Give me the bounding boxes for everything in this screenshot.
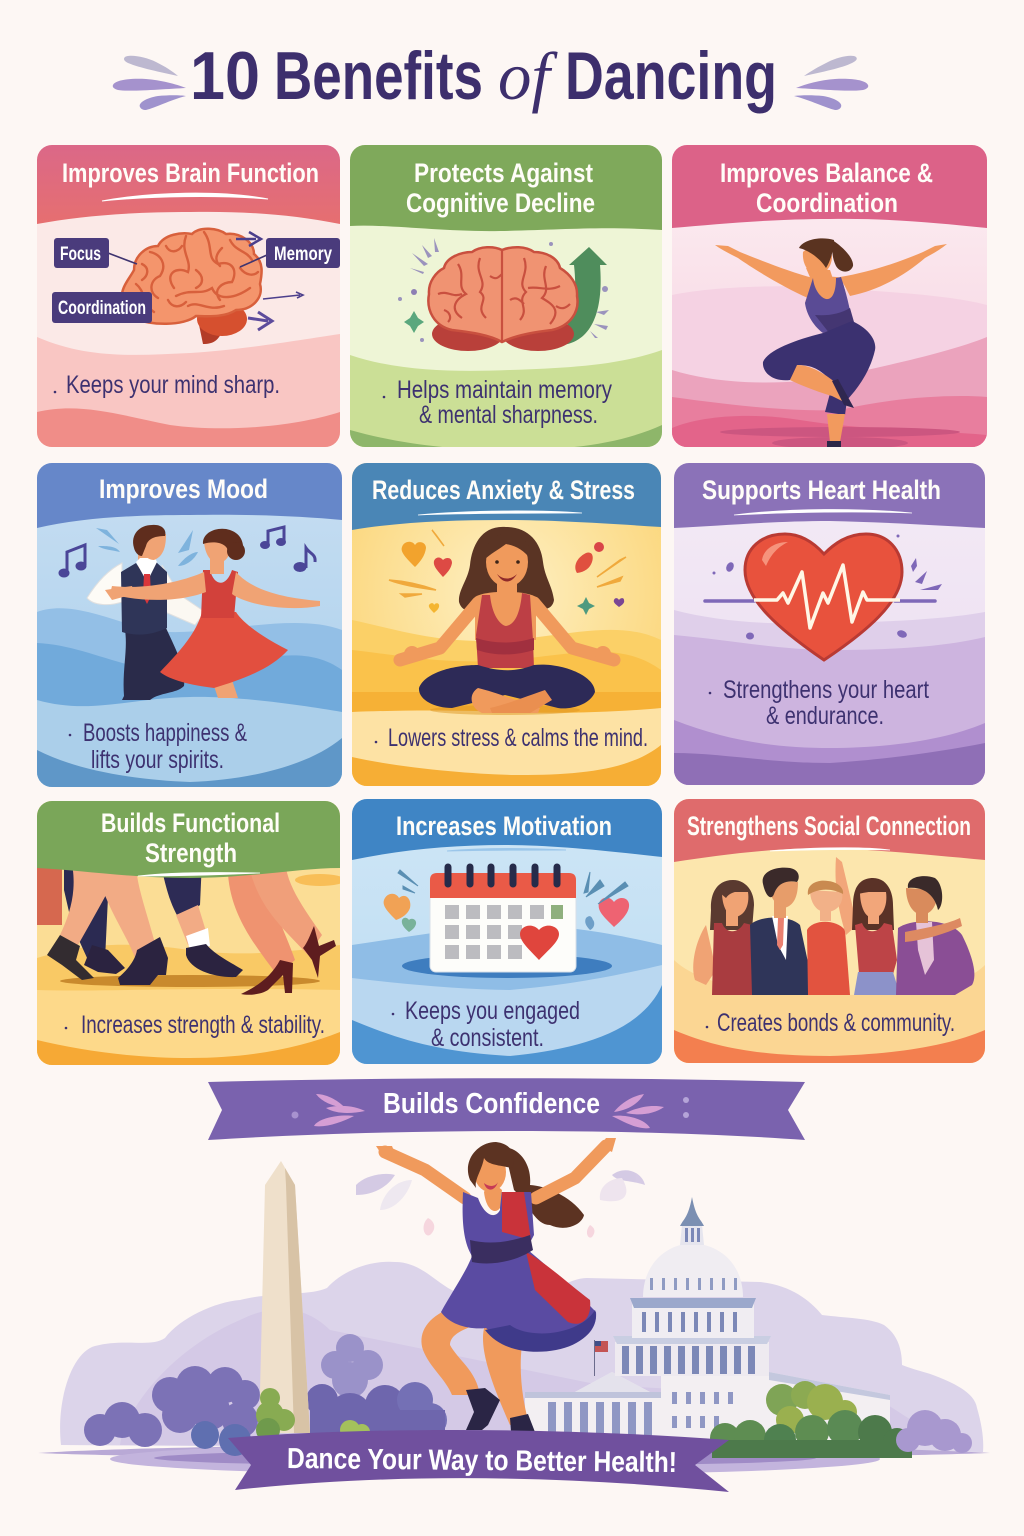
heading: Builds Functional bbox=[101, 808, 280, 838]
label: focus bbox=[54, 238, 109, 268]
heading: Strength bbox=[145, 838, 237, 868]
banner: builds confidence bbox=[208, 1078, 805, 1140]
illustration: group of friends bbox=[693, 857, 974, 995]
illustration: heart with pulse bbox=[705, 534, 935, 660]
banner: builds confidence: Builds Confidence bbox=[383, 1088, 600, 1120]
person: man in suit bbox=[750, 868, 815, 995]
dress bbox=[441, 1250, 596, 1350]
illustration: man dancing bbox=[87, 525, 205, 700]
benefit text bbox=[69, 719, 247, 774]
heading: Cognitive Decline bbox=[406, 188, 595, 218]
heading bbox=[101, 808, 280, 868]
benefit text: Boosts happiness & bbox=[83, 719, 247, 747]
green bushes at capitol bbox=[710, 1381, 972, 1458]
illustration: dancing feet bbox=[47, 870, 336, 995]
title: 10 bbox=[190, 38, 260, 114]
label: coordination bbox=[52, 292, 152, 323]
icon: left banner flourish bbox=[292, 1094, 365, 1126]
heading: Reduces Anxiety & Stress bbox=[372, 475, 635, 505]
arrow: lower bbox=[248, 312, 272, 330]
illustration: calendar bbox=[402, 867, 612, 978]
heading: Improves Balance & bbox=[720, 158, 933, 188]
heading bbox=[722, 162, 932, 212]
heading: Improves Mood bbox=[99, 474, 268, 504]
title: Dancing bbox=[565, 38, 777, 114]
benefit text bbox=[708, 680, 929, 724]
person: redhead woman bbox=[807, 857, 857, 995]
benefit text: Keeps your mind sharp. bbox=[66, 371, 280, 399]
title: Benefits bbox=[274, 38, 483, 114]
panel: improves mood bbox=[37, 463, 342, 787]
head bbox=[474, 1152, 506, 1192]
benefit text bbox=[383, 376, 612, 429]
banner: call to action bbox=[228, 1430, 729, 1492]
arrow: outward bbox=[263, 292, 303, 299]
icon: accent dots bbox=[712, 534, 942, 640]
illustration: balancing dancer bbox=[715, 238, 947, 447]
panel: reduces anxiety and stress bbox=[352, 463, 661, 786]
legs bbox=[421, 1310, 480, 1395]
icon: sparkles and dots bbox=[398, 238, 609, 342]
heading: Coordination bbox=[756, 188, 898, 218]
panel: improves balance and coordination bbox=[672, 145, 987, 449]
heading: Increases Motivation bbox=[396, 811, 612, 841]
illustration: front view brain bbox=[428, 247, 578, 351]
label: coordination: Coordination bbox=[58, 298, 146, 319]
arms bbox=[385, 1152, 465, 1198]
person: woman in red top bbox=[852, 878, 900, 995]
panel: protects against cognitive decline bbox=[350, 145, 662, 450]
title: of bbox=[498, 38, 558, 114]
benefit text: & consistent. bbox=[431, 1024, 544, 1052]
illustration: woman in red dress bbox=[110, 529, 320, 698]
benefit text bbox=[392, 997, 580, 1052]
heading: Protects Against bbox=[414, 158, 593, 188]
lavender hills bbox=[60, 1262, 983, 1452]
banner: call to action: Dance Your Way to Better Health! bbox=[287, 1443, 677, 1479]
obelisk bbox=[259, 1161, 310, 1433]
person: woman left bbox=[693, 880, 755, 995]
illustration: washington skyline bbox=[38, 1161, 990, 1475]
panel: improves brain function bbox=[37, 145, 340, 447]
benefit text: Increases strength & stability. bbox=[81, 1011, 325, 1039]
benefit text: & endurance. bbox=[766, 702, 884, 730]
benefit text: Helps maintain memory bbox=[397, 376, 612, 404]
title bbox=[190, 38, 777, 114]
illustration: side view brain bbox=[122, 229, 262, 344]
heading: Supports Heart Health bbox=[702, 475, 941, 505]
label: memory: Memory bbox=[274, 244, 332, 265]
heading: Improves Brain Function bbox=[62, 158, 319, 188]
panel: supports heart health bbox=[674, 463, 985, 785]
purple trees bbox=[84, 1334, 447, 1456]
icon: right banner flourish bbox=[612, 1094, 689, 1128]
illustration: meditating woman bbox=[400, 527, 614, 715]
arrow: rising green bbox=[566, 247, 607, 344]
hair back bbox=[504, 1147, 584, 1228]
icon: music notes bbox=[59, 527, 315, 577]
panel: increases motivation bbox=[352, 799, 662, 1064]
capitol building bbox=[525, 1197, 890, 1445]
heading bbox=[406, 158, 595, 218]
panel: strengthens social connection bbox=[674, 799, 985, 1063]
illustration: confident dancer bbox=[356, 1138, 645, 1445]
icon: right title swooshes bbox=[794, 56, 868, 110]
flag bbox=[594, 1340, 608, 1376]
label: focus: Focus bbox=[60, 244, 101, 265]
label: memory bbox=[266, 238, 340, 268]
benefit text: Keeps you engaged bbox=[405, 997, 580, 1025]
green bushes at obelisk bbox=[256, 1388, 370, 1442]
icon: floating hearts and sparks bbox=[389, 530, 626, 615]
panel: builds functional strength bbox=[37, 801, 345, 1065]
icon: motion dashes bbox=[96, 528, 198, 566]
icon: left title swooshes bbox=[113, 56, 186, 110]
arrow: memory bbox=[236, 232, 261, 246]
ground shadow bbox=[38, 1445, 990, 1458]
benefit text: Lowers stress & calms the mind. bbox=[388, 724, 648, 752]
icon: hearts and bursts bbox=[384, 870, 629, 932]
benefit text: & mental sharpness. bbox=[419, 401, 598, 429]
benefit text: lifts your spirits. bbox=[91, 746, 224, 774]
benefit text: Strengthens your heart bbox=[723, 676, 929, 704]
person: man in purple jacket bbox=[896, 876, 974, 995]
motion petals bbox=[356, 1170, 645, 1238]
